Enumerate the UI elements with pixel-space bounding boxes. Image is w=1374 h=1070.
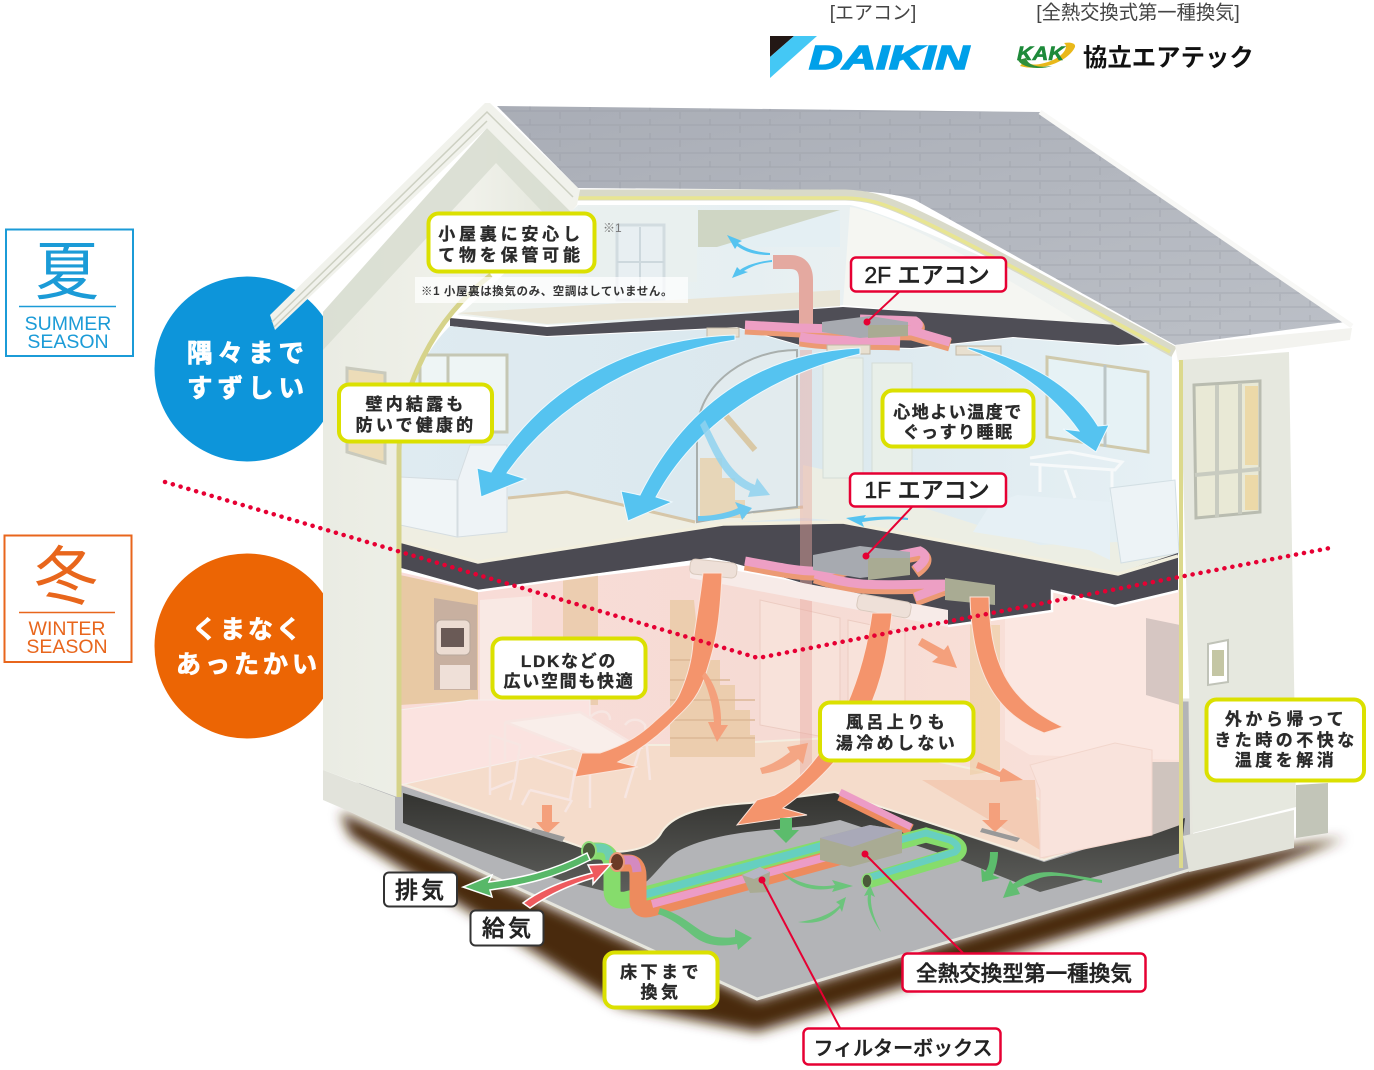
supply duct opening — [610, 853, 624, 871]
summer circle background — [154, 276, 340, 462]
arch opening and stairs — [697, 350, 797, 522]
logo: Daikin — [770, 36, 971, 78]
fridge — [480, 596, 532, 700]
callout: comfortable sleep — [882, 390, 1034, 446]
callout: LDK: 広い空間も快適 — [504, 672, 634, 691]
logo: Kyoritsu Airtech: KAK — [1017, 44, 1065, 65]
heat exchange ventilator box — [820, 825, 902, 867]
duct from ventilator to first floor — [840, 792, 911, 830]
label: filter box — [758, 876, 1000, 1064]
arrow: hall orange — [760, 743, 808, 774]
first floor air conditioner — [745, 546, 995, 605]
arrow: summer blue left — [477, 335, 735, 497]
winter circle background — [154, 554, 340, 738]
second floor air conditioner — [745, 316, 950, 345]
label: filter box: フィルターボックス — [814, 1037, 992, 1060]
summer circle text: 隅々まで — [187, 340, 309, 368]
panel: winter season badge: SEASON — [26, 636, 108, 658]
left gable wall — [323, 128, 571, 797]
callout: attic storage — [428, 214, 594, 272]
arrow: winter orange center — [737, 613, 892, 825]
label: 1F air conditioner: 1F エアコン — [864, 477, 990, 503]
arrow: underfloor green left — [658, 908, 752, 950]
bed — [973, 480, 1179, 563]
wood pillar — [563, 572, 598, 705]
label: supply — [470, 910, 544, 946]
panel: summer season badge: 夏 — [35, 236, 99, 308]
kitchen counter — [400, 700, 590, 785]
arrows: intake flow near ventilator — [782, 872, 881, 932]
bathroom tile wall — [1005, 590, 1180, 760]
label: exhaust — [384, 872, 457, 906]
second floor slab edge — [397, 521, 1178, 625]
kitchen cabinets — [400, 575, 478, 705]
floor return grille bath — [980, 828, 1020, 842]
callout: comfortable sleep: 心地よい温度で — [893, 403, 1023, 422]
label: 1F air conditioner — [850, 474, 1006, 560]
filter box — [742, 867, 770, 893]
label: exhaust: 排気 — [395, 877, 447, 903]
window: left wall — [347, 368, 385, 463]
floor left — [400, 492, 803, 561]
panel: winter season badge: WINTER — [29, 618, 105, 640]
first floor duct beam — [689, 559, 948, 627]
arrow: stairs light blue — [700, 420, 770, 497]
arrow: return green from bath — [981, 852, 1000, 882]
mirror — [1146, 618, 1180, 705]
arrow: attic lower air — [732, 260, 772, 278]
callout: returning home: 温度を解消 — [1235, 751, 1337, 770]
footnote band: ※1 小屋裏は換気のみ、空調はしていません。 — [421, 284, 673, 298]
arrow: summer blue right — [968, 347, 1109, 452]
hall doors — [760, 600, 905, 745]
winter circle text — [176, 616, 321, 679]
washer furniture — [400, 445, 507, 537]
baseboard — [508, 492, 803, 522]
floor right — [803, 465, 1172, 573]
logo: Kyoritsu Airtech — [1017, 43, 1254, 72]
panel: summer season badge — [6, 230, 133, 356]
upper ceiling band — [450, 307, 1145, 348]
outlet duct opening — [862, 874, 872, 888]
callout: after bath: 湯冷めしない — [836, 734, 958, 753]
vertical duct — [773, 262, 806, 780]
arrow: attic upper air — [727, 235, 770, 255]
winter circle text: くまなく — [192, 616, 304, 644]
arrow: floor light blue — [698, 502, 752, 521]
callout: underfloor ventilation — [604, 952, 718, 1008]
logo: Daikin: DAIKIN — [809, 39, 971, 76]
arrow: return green center — [773, 818, 799, 843]
floor return grille dining — [530, 828, 565, 842]
dining table and chairs — [490, 712, 650, 812]
arrow: bath floor orange — [976, 762, 1023, 782]
gable trim — [270, 103, 580, 330]
logo: Kyoritsu Airtech: 協立エアテック — [1083, 45, 1254, 72]
label: supply: 給気 — [482, 915, 534, 941]
roof — [497, 106, 1352, 352]
wood post — [970, 625, 1000, 775]
ground slab — [345, 700, 1192, 999]
window: right wall large — [1194, 381, 1260, 518]
arrow: below first floor label — [846, 515, 908, 527]
callout: after bath: 風呂上りも — [846, 713, 948, 732]
footnote mark: ※1 — [603, 221, 622, 235]
arrow: underfloor green right — [1003, 872, 1102, 898]
second floor vents — [707, 328, 1001, 355]
callout: returning home: きた時の不快な — [1214, 731, 1358, 750]
arrow: small orange to washroom — [918, 638, 957, 668]
sink — [1152, 762, 1180, 835]
right wall insulation — [1179, 360, 1183, 868]
panel: winter season badge — [4, 536, 132, 662]
right roof fascia — [1175, 328, 1352, 362]
panel: summer season badge: SUMMER — [25, 313, 111, 335]
arrow: winter orange left — [575, 573, 722, 777]
desk — [1030, 452, 1122, 500]
window: right wall small — [1208, 640, 1228, 685]
label: heat exchange ventilator — [862, 850, 1146, 992]
callout: underfloor ventilation: 換気 — [640, 983, 682, 1002]
window: left room — [420, 355, 507, 432]
air conditioner brand heading: [エアコン] — [830, 3, 916, 24]
gable wall shading — [323, 128, 571, 350]
panel: winter season badge: 冬 — [34, 541, 98, 613]
callout: returning home — [1206, 700, 1364, 780]
red dotted season divider — [165, 482, 1330, 658]
bath floor — [922, 780, 1040, 850]
summer circle text: すずしい — [187, 375, 309, 403]
ceiling highlight line — [400, 559, 1178, 626]
utility box — [1296, 783, 1328, 838]
footnote band — [415, 277, 688, 303]
callout: underfloor ventilation: 床下まで — [620, 963, 702, 982]
callout: wall condensation: 壁内結露も — [366, 395, 466, 414]
callout: wall condensation: 防いで健康的 — [356, 416, 476, 435]
label: 2F air conditioner — [851, 258, 1006, 326]
underfloor void — [403, 792, 1185, 895]
panel: attic space — [457, 205, 1172, 345]
callout: comfortable sleep: ぐっすり睡眠 — [902, 423, 1014, 442]
left foundation — [323, 770, 395, 831]
staircase — [670, 600, 755, 757]
callout: after bath — [820, 702, 974, 760]
ventilation brand heading: [全熱交換式第一種換気] — [1036, 2, 1240, 24]
arrow: dining floor vent — [536, 805, 560, 834]
right wall — [1180, 352, 1296, 833]
label: heat exchange ventilator: 全熱交換型第一種換気 — [916, 961, 1132, 986]
bathtub — [1030, 743, 1152, 858]
supply duct pink — [618, 852, 845, 909]
ground shadow — [340, 812, 1345, 1032]
arrow: bath floor vent — [982, 803, 1008, 832]
arrow: winter orange right — [970, 597, 1063, 733]
callout: returning home: 外から帰って — [1225, 710, 1347, 729]
callout: LDK — [492, 638, 646, 698]
second floor edge line — [400, 522, 1178, 574]
rolled vent right — [856, 593, 912, 619]
callout: attic storage: 小屋裏に安心し — [438, 224, 584, 244]
window: bedroom — [1047, 357, 1148, 452]
exhaust duct green — [589, 845, 825, 900]
label: 2F air conditioner: 2F エアコン — [864, 262, 990, 288]
callout: attic storage: て物を保管可能 — [438, 245, 584, 265]
callout: wall condensation — [339, 384, 492, 442]
arrow: stair orange — [702, 672, 728, 742]
panel: first floor room — [400, 565, 1180, 860]
arrow: summer blue center — [621, 348, 860, 521]
outlet duct green right — [868, 833, 959, 881]
doors — [823, 358, 912, 488]
rolled vent left — [689, 559, 738, 578]
arrow: supply red — [523, 864, 611, 908]
right foundation — [1183, 810, 1294, 872]
panel: summer season badge: SEASON — [27, 331, 109, 353]
summer circle text — [187, 340, 309, 403]
floor — [400, 738, 1180, 860]
exhaust duct opening — [582, 842, 596, 860]
wall insulation arc — [399, 275, 491, 797]
callout: LDK: LDKなどの — [521, 652, 617, 671]
panel: second floor room — [397, 326, 1179, 573]
winter circle text: あったかい — [176, 651, 321, 679]
arrow: exhaust green — [463, 853, 590, 897]
